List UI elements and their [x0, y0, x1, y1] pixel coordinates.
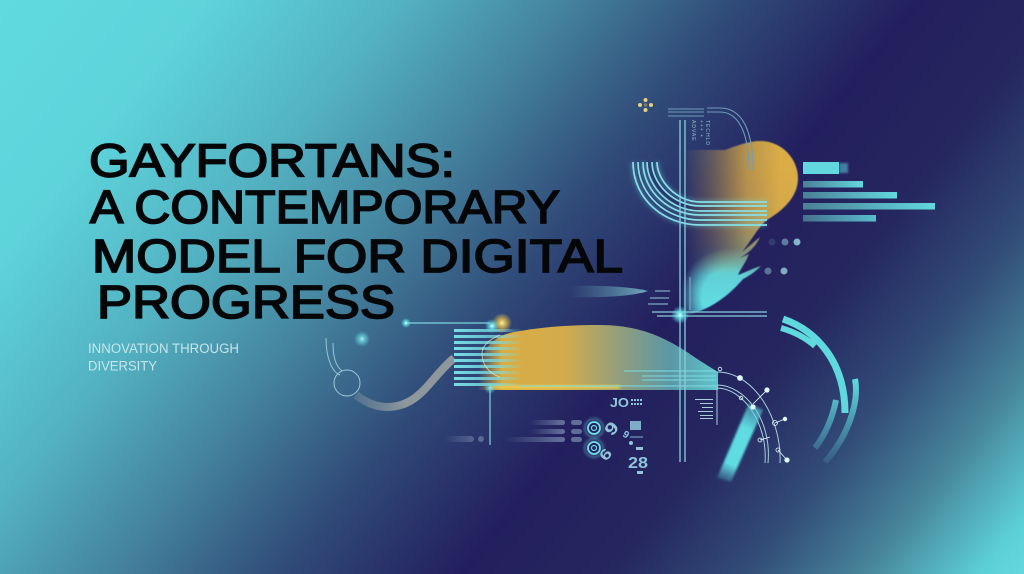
- gold to cyan heart shape with jagged tail: [682, 141, 798, 316]
- title line 3: MODEL FOR DIGITAL: [92, 230, 623, 282]
- glowing ring icons: [585, 419, 603, 457]
- gold mound shape: [478, 325, 718, 390]
- tiny text block: [695, 399, 713, 419]
- top lines and arcs: [668, 108, 753, 170]
- title line 1: GAYFORTANS:: [89, 134, 455, 186]
- small vertical labels: +++ +: [698, 120, 704, 138]
- fading dashboard bars: [445, 420, 582, 442]
- concentric stripes: [633, 162, 767, 225]
- diagonal glowing bar: [717, 403, 763, 482]
- horizontal stripes: [454, 329, 522, 386]
- subtitle line 1: INNOVATION THROUGH: [88, 341, 239, 356]
- curved tube with circle: [326, 338, 454, 407]
- small vertical labels: ADVAE: [690, 120, 696, 142]
- yellow glow at mound base: [490, 385, 620, 389]
- subtitle: [88, 341, 239, 374]
- illustration: lower mound figure: [326, 313, 718, 474]
- central glow point: [671, 306, 689, 324]
- horizontal axis lines: [652, 312, 767, 316]
- short dashes: [648, 277, 690, 310]
- dot rows: [764, 238, 800, 274]
- small vertical labels: TECHLD: [704, 120, 710, 146]
- thin circuit arcs: [717, 372, 780, 463]
- illustration: circuit arcs: [695, 319, 856, 482]
- abstract glyph cluster: 9: [620, 429, 631, 442]
- vertical axis lines: [680, 120, 685, 462]
- title line 4: PROGRESS: [97, 276, 395, 328]
- subtitle line 2: DIVERSITY: [88, 358, 157, 374]
- circuit nodes: [718, 367, 789, 462]
- abstract glyph cluster: JO: [610, 395, 629, 410]
- title line 2: A CONTEMPORARY: [90, 181, 560, 233]
- grey pointed ellipse: [570, 286, 648, 297]
- illustration: upper heart figure: [570, 98, 935, 316]
- abstract glyph cluster: 6: [595, 445, 616, 464]
- glowing lights: [354, 313, 512, 394]
- connector lines: [406, 323, 490, 445]
- title: [89, 134, 623, 328]
- concentric stripes glow: [633, 162, 767, 225]
- overlay lines on mound: [520, 371, 718, 386]
- horizontal bars: [803, 162, 935, 222]
- gold cross of dots icon: [638, 98, 653, 112]
- abstract glyph cluster: 28: [628, 455, 648, 472]
- thick cyan arcs: [781, 319, 856, 462]
- thin inner arc: [482, 335, 500, 377]
- abstract glyph cluster: [595, 395, 648, 474]
- small vertical labels: [690, 120, 710, 146]
- abstract glyph cluster: 9: [601, 418, 623, 440]
